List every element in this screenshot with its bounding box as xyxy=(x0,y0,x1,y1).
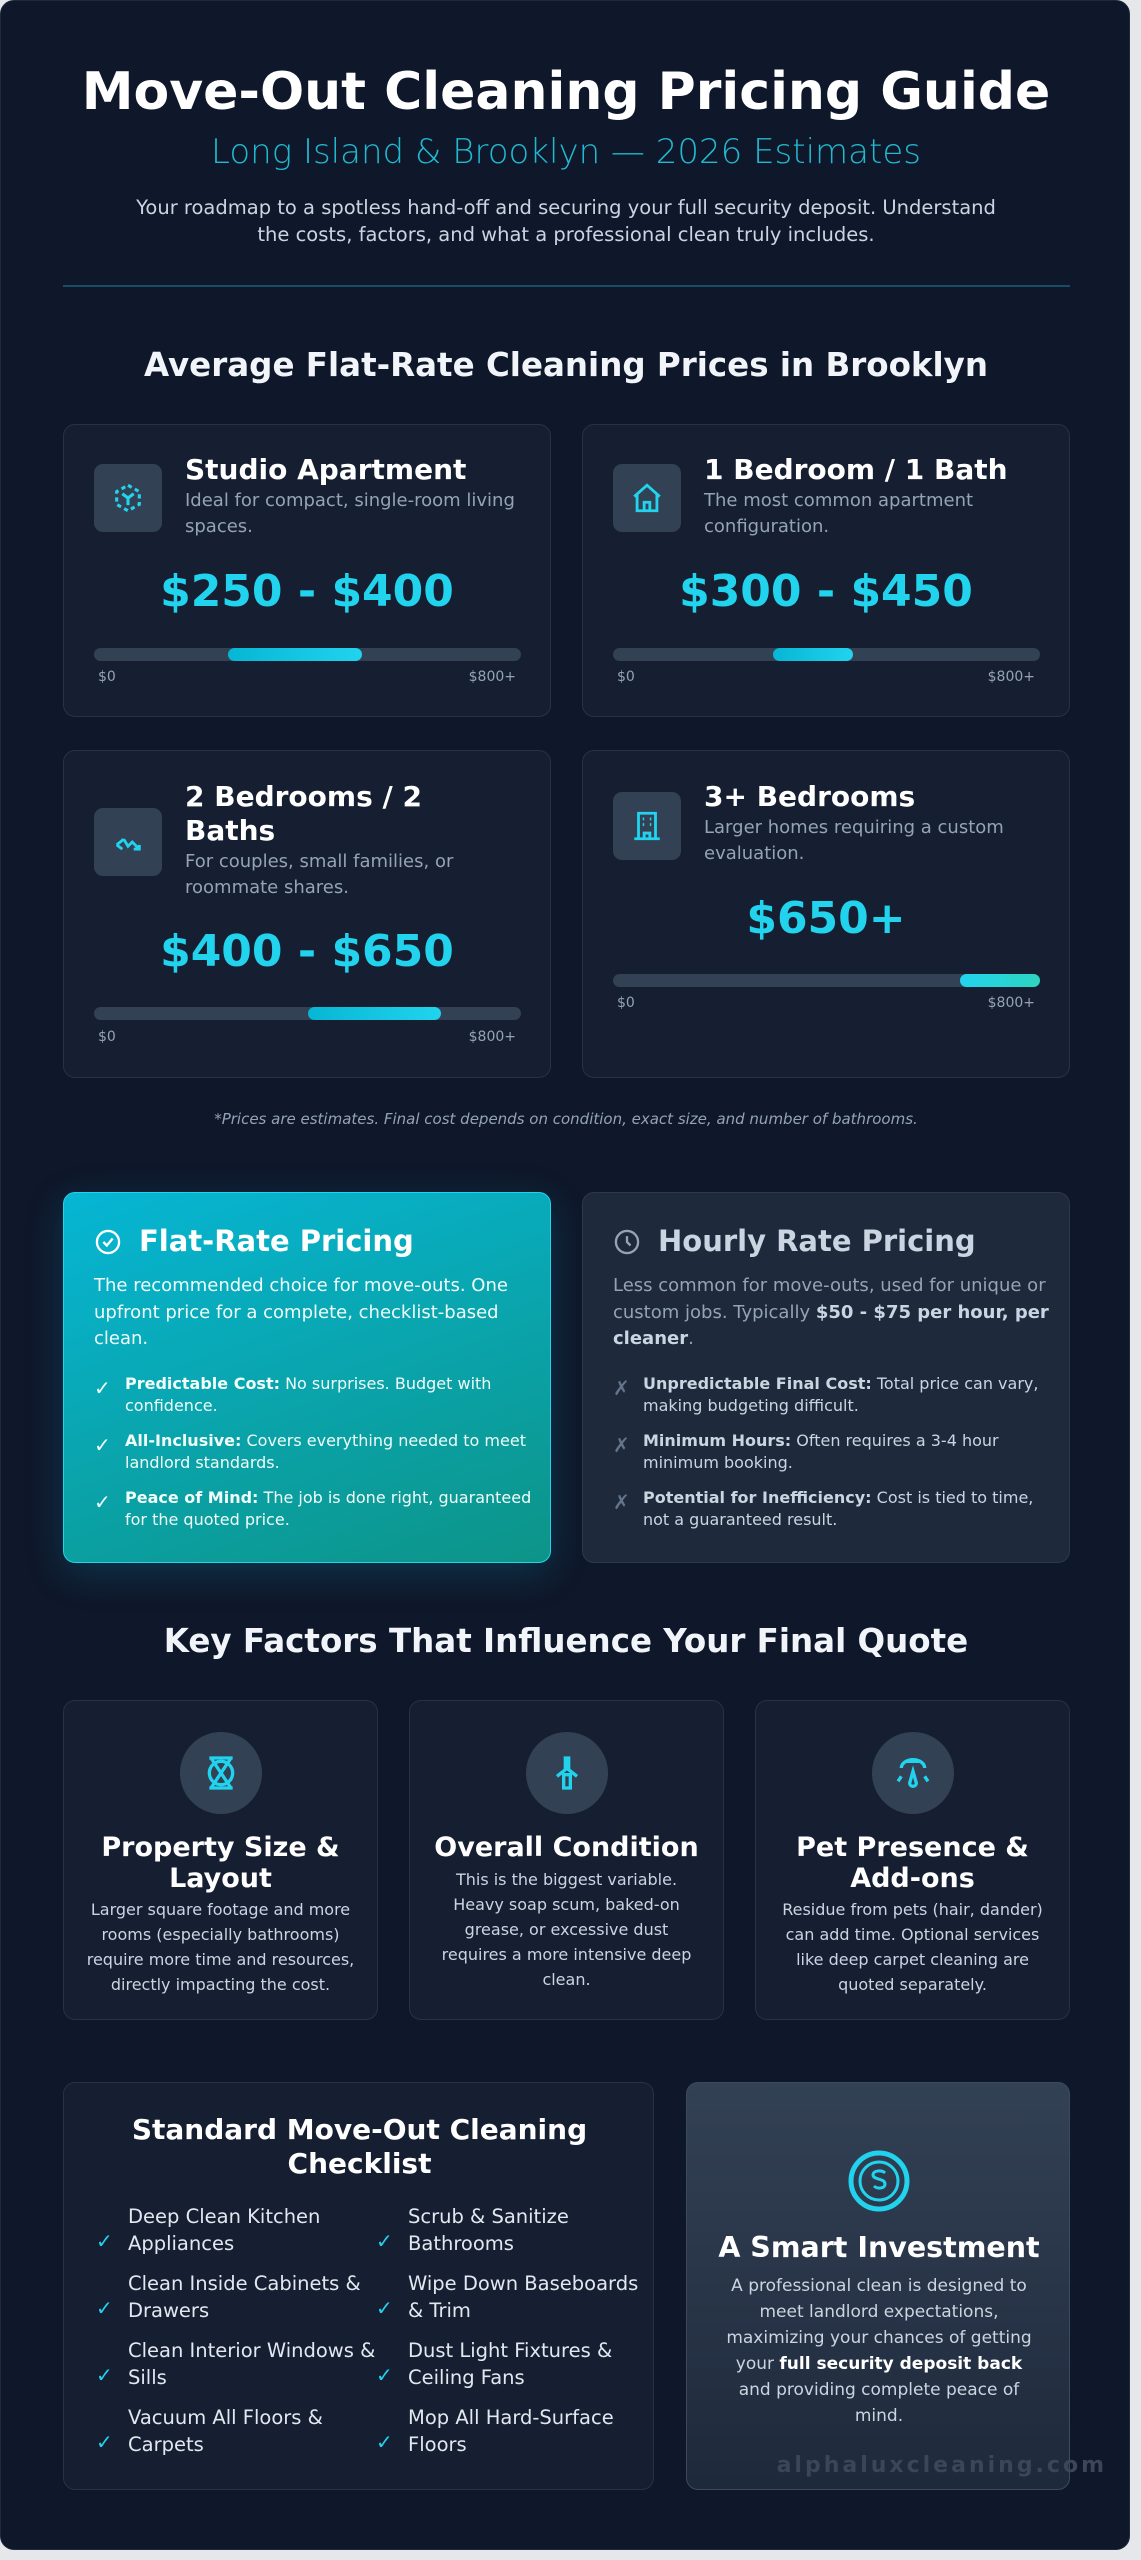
drawbacks list: ✗ xyxy=(613,1376,630,1400)
drawbacks list: Potential for Inefficiency: Cost is tied to time, not a guaranteed result. xyxy=(643,1488,1033,1529)
drawbacks list: Minimum Hours: Often requires a 3-4 hour minimum booking. xyxy=(643,1431,999,1472)
title: Add-ons xyxy=(850,1863,975,1894)
icon: dollar coin xyxy=(848,2150,910,2212)
checklist items: ✓ xyxy=(96,2430,113,2454)
desc: Larger homes requiring a custom evaluation. xyxy=(704,817,1004,864)
checklist items: Vacuum All Floors & Carpets xyxy=(128,2406,323,2456)
checklist items: Deep Clean Kitchen Appliances xyxy=(128,2205,320,2255)
icon: pets xyxy=(872,1732,954,1814)
desc: For couples, small families, or roommate shares. xyxy=(185,851,453,898)
drawbacks list: Unpredictable Final Cost: Total price can vary, making budgeting difficult. xyxy=(643,1374,1038,1415)
intro text: Your roadmap to a spotless hand-off and securing your full security deposit. Understand the costs, factors, and what a professional clean truly includes. xyxy=(136,196,996,246)
factor card: condition xyxy=(409,1700,724,2020)
panel: flat-rate pricing xyxy=(63,1192,551,1563)
icon: family xyxy=(94,808,162,876)
icon: size xyxy=(180,1732,262,1814)
price: $300 - $450 xyxy=(679,566,973,617)
checklist items: Wipe Down Baseboards & Trim xyxy=(408,2272,638,2322)
price: $250 - $400 xyxy=(160,566,454,617)
benefits list: ✓ xyxy=(94,1433,111,1457)
card: 1 bedroom xyxy=(582,424,1070,717)
heading: Flat-Rate Pricing xyxy=(139,1224,414,1258)
heading xyxy=(132,2113,587,2180)
footnote: *Prices are estimates. Final cost depends on condition, exact size, and number of bathrooms. xyxy=(214,1110,918,1128)
card: 2 bedrooms xyxy=(63,750,551,1078)
checklist items: Clean Inside Cabinets & Drawers xyxy=(128,2272,361,2322)
panel: checklist xyxy=(63,2082,654,2490)
benefits list: Peace of Mind: The job is done right, guaranteed for the quoted price. xyxy=(125,1488,531,1529)
title: Layout xyxy=(169,1863,272,1894)
range bar xyxy=(613,974,1040,987)
desc: This is the biggest variable. Heavy soap scum, baked-on grease, or excessive dust requires a more intensive deep clean. xyxy=(442,1870,691,1989)
range bar xyxy=(94,648,521,661)
desc: The most common apartment configuration. xyxy=(704,490,973,537)
price: $400 - $650 xyxy=(160,926,454,977)
icon: check circle xyxy=(96,1230,120,1254)
subtitle: Long Island & Brooklyn — 2026 Estimates xyxy=(211,132,921,172)
title: Pet Presence & xyxy=(796,1832,1029,1863)
checklist items: ✓ xyxy=(376,2296,393,2320)
title: 2 Bedrooms / 2 Baths xyxy=(185,780,422,847)
title: Studio Apartment xyxy=(185,453,466,486)
desc: The recommended choice for move-outs. One upfront price for a complete, checklist-based clean. xyxy=(94,1275,508,1349)
icon: house xyxy=(613,464,681,532)
desc: A professional clean is designed to meet landlord expectations, maximizing your chances of getting your full security deposit back and providing complete peace of mind. xyxy=(726,2276,1032,2426)
checklist items: Clean Interior Windows & Sills xyxy=(128,2339,375,2389)
desc: Ideal for compact, single-room living spaces. xyxy=(185,490,515,537)
icon: building xyxy=(613,792,681,860)
title: Property Size & xyxy=(101,1832,340,1863)
title xyxy=(101,1832,340,1894)
card: 3+ bedrooms: $0 xyxy=(617,995,635,1011)
heading: Hourly Rate Pricing xyxy=(658,1224,976,1258)
heading: Checklist xyxy=(288,2147,431,2180)
card: studio: $0 xyxy=(98,669,116,685)
panel: hourly rate pricing xyxy=(582,1192,1070,1563)
checklist items: ✓ xyxy=(376,2363,393,2387)
title: Overall Condition xyxy=(434,1832,699,1863)
checklist items: ✓ xyxy=(96,2363,113,2387)
footer brand: alphaluxcleaning.com xyxy=(777,2453,1107,2478)
checklist items: Dust Light Fixtures & Ceiling Fans xyxy=(408,2339,612,2389)
benefits list xyxy=(94,1374,531,1529)
panel: smart investment xyxy=(686,2082,1070,2490)
section heading: prices: Average Flat-Rate Cleaning Prices in Brooklyn xyxy=(144,346,988,384)
card: studio xyxy=(63,424,551,717)
checklist items: ✓ xyxy=(96,2296,113,2320)
benefits list: All-Inclusive: Covers everything needed to meet landlord standards. xyxy=(125,1431,526,1472)
icon: brush xyxy=(526,1732,608,1814)
card: 3+ bedrooms xyxy=(582,750,1070,1078)
title: 1 Bedroom / 1 Bath xyxy=(704,453,1008,486)
desc: Less common for move-outs, used for unique or custom jobs. Typically $50 - $75 per hour, per cleaner. xyxy=(613,1275,1049,1349)
factor card: pets xyxy=(755,1700,1070,2020)
range bar xyxy=(94,1007,521,1020)
card: studio: $800+ xyxy=(469,669,516,685)
desc: Residue from pets (hair, dander) can add time. Optional services like deep carpet cleaning are quoted separately. xyxy=(782,1900,1043,1994)
heading: A Smart Investment xyxy=(718,2231,1040,2264)
card: 1 bedroom: $0 xyxy=(617,669,635,685)
range bar xyxy=(613,648,1040,661)
checklist items: Scrub & Sanitize Bathrooms xyxy=(408,2205,569,2255)
checklist items: Mop All Hard-Surface Floors xyxy=(408,2406,614,2456)
benefits list: ✓ xyxy=(94,1376,111,1400)
title xyxy=(796,1832,1029,1894)
drawbacks list: ✗ xyxy=(613,1433,630,1457)
checklist items xyxy=(96,2205,638,2456)
benefits list: ✓ xyxy=(94,1490,111,1514)
icon: clock xyxy=(614,1230,640,1254)
card: 2 bedrooms: $800+ xyxy=(469,1029,516,1045)
card: 2 bedrooms: $0 xyxy=(98,1029,116,1045)
section heading: key factors: Key Factors That Influence Your Final Quote xyxy=(164,1622,968,1660)
factor card: property size xyxy=(63,1700,378,2020)
card: 3+ bedrooms: $800+ xyxy=(988,995,1035,1011)
drawbacks list: ✗ xyxy=(613,1490,630,1514)
checklist items: ✓ xyxy=(96,2229,113,2253)
title: Move-Out Cleaning Pricing Guide xyxy=(82,62,1050,122)
heading: Standard Move-Out Cleaning xyxy=(132,2113,587,2146)
title: 3+ Bedrooms xyxy=(704,780,915,813)
checklist items: ✓ xyxy=(376,2229,393,2253)
desc: Larger square footage and more rooms (especially bathrooms) require more time and resources, directly impacting the cost. xyxy=(87,1900,354,1994)
icon: studio xyxy=(94,464,162,532)
price: $650+ xyxy=(746,893,906,944)
benefits list: Predictable Cost: No surprises. Budget with confidence. xyxy=(125,1374,491,1415)
drawbacks list xyxy=(613,1374,1038,1529)
checklist items: ✓ xyxy=(376,2430,393,2454)
card: 1 bedroom: $800+ xyxy=(988,669,1035,685)
